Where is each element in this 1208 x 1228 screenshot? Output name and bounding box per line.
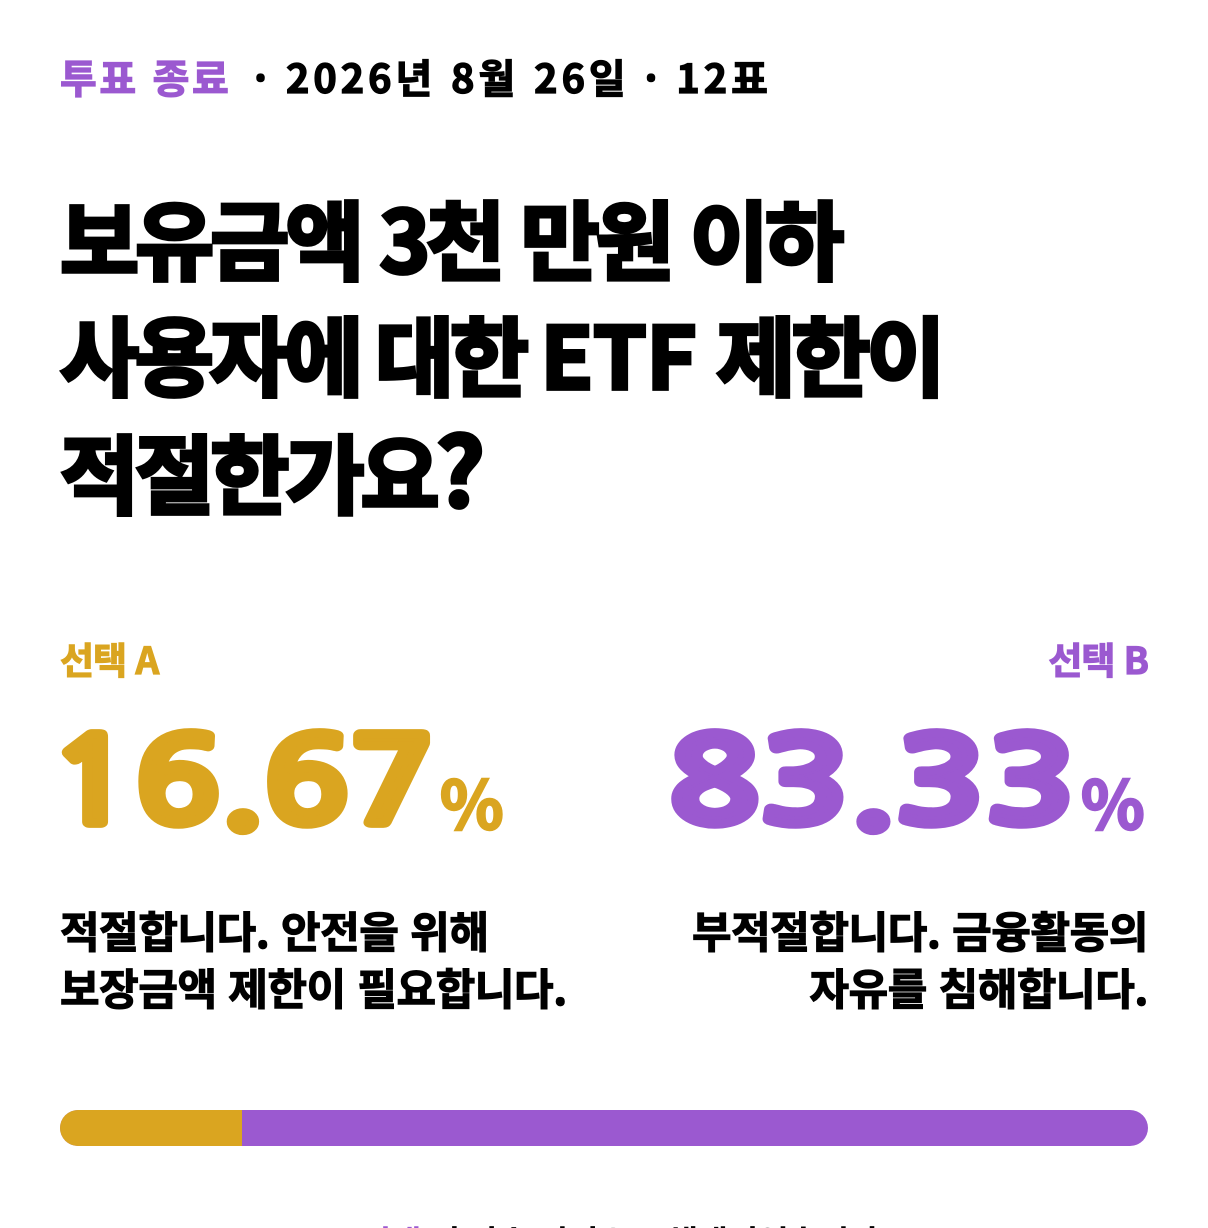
title [59, 173, 942, 535]
title: 적절한가요? [60, 396, 485, 535]
result bar [60, 1110, 1148, 1146]
label: choice B: 선택 B [1048, 631, 1148, 685]
date and vote count: · 2026년 8월 26일 · 12표 [254, 47, 772, 105]
text: choice A description: 적절합니다. 안전을 위해 [60, 899, 488, 961]
title: 사용자에 대한 ETF 제한이 [60, 289, 942, 414]
label: choice A: 선택 A [60, 631, 158, 685]
percentage: choice B: 83.33 [669, 724, 1076, 841]
text: choice A description: 보장금액 제한이 필요합니다. [60, 956, 567, 1018]
percent sign: choice A: % [440, 753, 504, 849]
text: choice A description [60, 899, 567, 1018]
header: vote status line [60, 47, 772, 105]
text: choice B description: 자유를 침해합니다. [809, 956, 1148, 1018]
text: choice B description [692, 899, 1148, 1018]
percent sign: choice B: % [1081, 753, 1145, 849]
percentage: choice A: 16.67 [49, 724, 435, 841]
title: 보유금액 3천 만원 이하 [60, 173, 840, 298]
status label: 투표 종료 [60, 47, 231, 105]
text: choice B description: 부적절합니다. 금융활동의 [692, 899, 1148, 961]
bar segment: choice A [60, 1110, 242, 1146]
